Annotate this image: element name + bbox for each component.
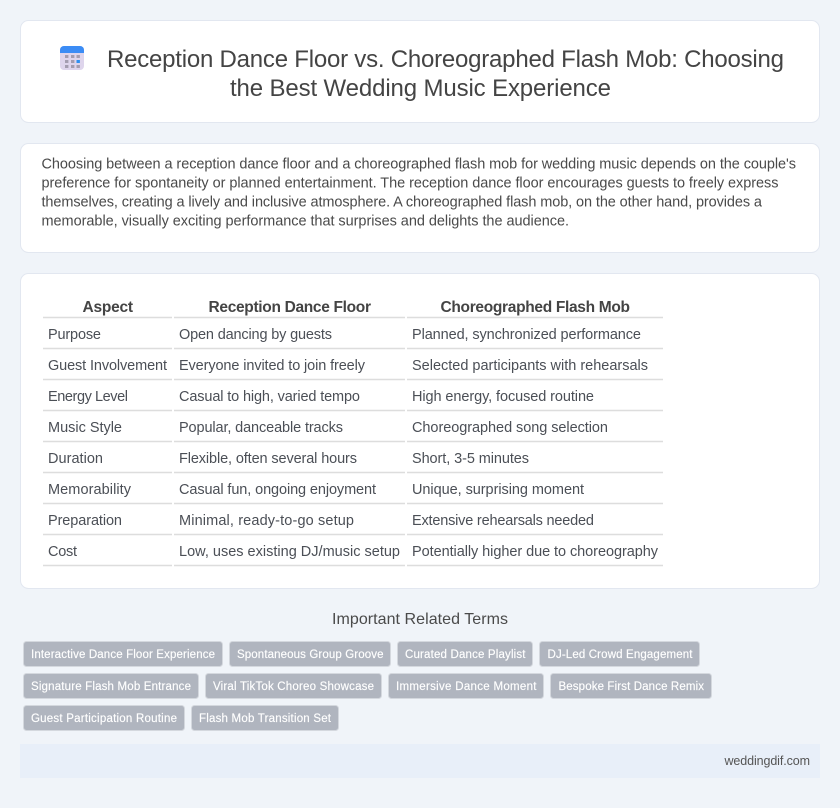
tag: Spontaneous Group Groove — [237, 649, 384, 661]
text block: intro: preference for spontaneity or planned entertainment. The reception dance floor encourages guests to freely express — [42, 176, 778, 192]
tag — [24, 674, 198, 698]
table header: Reception Dance Floor — [208, 299, 371, 316]
row: energy level: High energy, focused routine — [412, 389, 594, 405]
text block: intro: Choosing between a reception dance floor and a choreographed flash mob for wedding music depends on the couple's — [42, 156, 796, 172]
tag — [192, 706, 338, 730]
tag: Interactive Dance Floor Experience — [31, 649, 215, 661]
tag — [398, 642, 532, 666]
row: duration — [48, 451, 529, 467]
icon: calendar — [60, 46, 84, 70]
tag: Bespoke First Dance Remix — [558, 681, 704, 693]
row: guest involvement: Everyone invited to join freely — [179, 358, 366, 374]
tag — [388, 674, 544, 698]
text block: intro: memorable, visually exciting performance that surprises and delights the audience. — [42, 214, 569, 230]
row: music style: Popular, danceable tracks — [179, 420, 343, 436]
tag: Flash Mob Transition Set — [199, 713, 332, 725]
row: purpose — [48, 327, 641, 343]
footer: weddingdif.com — [724, 754, 810, 768]
tag: Signature Flash Mob Entrance — [31, 681, 191, 693]
footer — [20, 744, 820, 778]
title — [107, 46, 784, 102]
table header: Aspect — [82, 299, 133, 316]
row: purpose: Open dancing by guests — [179, 327, 332, 343]
row: guest involvement: Selected participants with rehearsals — [412, 358, 648, 374]
row: music style — [48, 420, 608, 436]
row: duration: Duration — [48, 451, 103, 467]
tag — [24, 706, 184, 730]
row: preparation — [48, 513, 594, 529]
row: music style: Music Style — [48, 420, 122, 436]
heading: related terms: Important Related Terms — [332, 611, 508, 628]
row: energy level: Energy Level — [48, 389, 128, 405]
tag — [24, 642, 222, 666]
table header: Choreographed Flash Mob — [440, 299, 630, 316]
row: cost: Cost — [48, 544, 77, 560]
tag — [550, 674, 712, 698]
row: memorability: Unique, surprising moment — [412, 482, 584, 498]
row: preparation: Preparation — [48, 513, 122, 529]
row: energy level: Casual to high, varied tempo — [179, 389, 360, 405]
row: energy level — [48, 389, 594, 405]
panel: comparison table — [20, 274, 820, 588]
row: cost: Potentially higher due to choreography — [412, 544, 659, 560]
row: memorability: Casual fun, ongoing enjoyment — [179, 482, 376, 498]
text block: intro — [42, 156, 796, 230]
row: purpose: Purpose — [48, 327, 101, 343]
title: Reception Dance Floor vs. Choreographed Flash Mob: Choosing — [107, 46, 784, 73]
table header — [82, 299, 630, 316]
row: guest involvement — [48, 358, 648, 374]
tag: Immersive Dance Moment — [396, 681, 537, 693]
row: cost — [48, 544, 659, 560]
tag — [540, 642, 700, 666]
title: the Best Wedding Music Experience — [230, 75, 611, 102]
tag: Guest Participation Routine — [31, 713, 177, 725]
tag: Curated Dance Playlist — [405, 649, 526, 661]
row: preparation: Extensive rehearsals needed — [412, 513, 594, 529]
row: duration: Short, 3-5 minutes — [412, 451, 529, 467]
row: music style: Choreographed song selection — [412, 420, 608, 436]
tag — [230, 642, 390, 666]
text block: intro: themselves, creating a lively and inclusive atmosphere. A choreographed flash mob, on the other hand, provides a — [42, 195, 763, 211]
row: duration: Flexible, often several hours — [179, 451, 357, 467]
row: cost: Low, uses existing DJ/music setup — [179, 544, 400, 560]
row: memorability — [48, 482, 584, 498]
tag: Viral TikTok Choreo Showcase — [213, 681, 374, 693]
panel: title card — [20, 20, 820, 122]
panel: intro paragraph — [20, 144, 820, 252]
row: purpose: Planned, synchronized performance — [412, 327, 641, 343]
tag: DJ-Led Crowd Engagement — [548, 649, 693, 661]
row: preparation: Minimal, ready-to-go setup — [179, 513, 354, 529]
row: guest involvement: Guest Involvement — [48, 358, 167, 374]
tag — [206, 674, 382, 698]
tag group: related terms — [24, 642, 712, 730]
row: memorability: Memorability — [48, 482, 132, 498]
